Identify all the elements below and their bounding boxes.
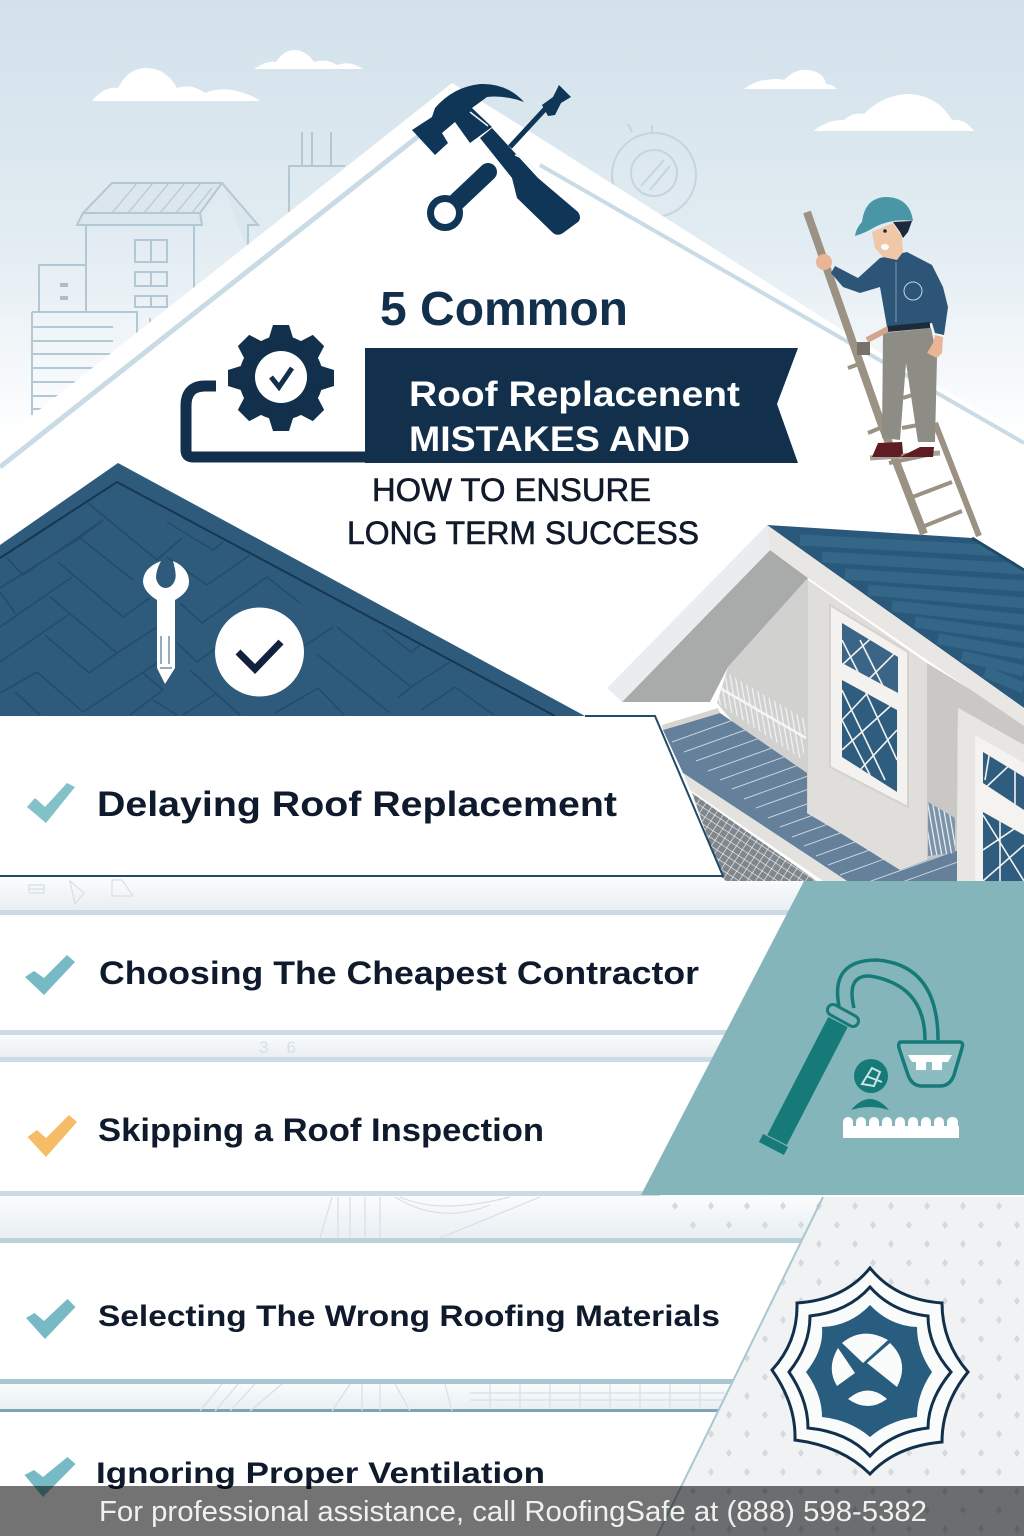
item 2: Choosing The Cheapest Contractor [99, 955, 699, 991]
icon: circled check [215, 608, 304, 696]
bracket line [186, 386, 370, 457]
icon: octagonal star badge [772, 1268, 968, 1474]
panel: dotted bottom right with badge [657, 1197, 1024, 1536]
tool pouch and strap [867, 328, 890, 340]
right wall [927, 663, 1024, 860]
shoes [872, 442, 934, 457]
gray soffit and side wall [622, 550, 808, 702]
footer bar: For professional assistance, call RoofingSafe at (888) 598-5382 [99, 1496, 927, 1528]
banner text: Roof Replacenent [409, 375, 740, 414]
hammer [412, 84, 580, 235]
list row 1 panel [0, 716, 723, 876]
screwdriver [510, 85, 571, 147]
hands [816, 254, 943, 358]
sky background [0, 0, 1024, 440]
item 5 [24, 1457, 545, 1497]
item 4 [26, 1299, 720, 1339]
left roof illustration [0, 463, 585, 716]
title banner with gear [186, 325, 798, 463]
background bands and dividers [0, 878, 820, 1412]
house illustration [607, 525, 1024, 890]
ghost numbers: 3 6 [259, 1038, 296, 1057]
hair [893, 221, 912, 238]
clouds [92, 50, 974, 131]
subtitle: HOW TO ENSURE [372, 472, 651, 508]
belt [888, 325, 930, 329]
dormer wall [808, 580, 927, 870]
legs [882, 328, 937, 442]
small railing [928, 802, 955, 856]
heading: 5 Common: 5 Common [380, 283, 628, 336]
panel: teal with gutter icon [641, 881, 1024, 1195]
face [872, 223, 903, 260]
icon: gutter hose and bucket [761, 960, 963, 1151]
item 5: Ignoring Proper Ventilation [96, 1457, 545, 1490]
hard hat [855, 197, 913, 236]
window two [957, 708, 1024, 881]
item 4: Selecting The Wrong Roofing Materials [98, 1300, 720, 1333]
subtitle [347, 472, 699, 551]
background line art: city buildings [32, 132, 345, 415]
ghost shapes [29, 880, 725, 1411]
ladder [807, 212, 979, 536]
icon: gear with check [228, 325, 334, 431]
roof rafter lines [0, 127, 1024, 467]
railing [717, 673, 807, 760]
roof shingles [767, 525, 1024, 708]
banner text: MISTAKES AND [409, 420, 690, 459]
shirt [831, 252, 948, 335]
item 1: Delaying Roof Replacement [97, 785, 617, 824]
icon: crossed hammer, screwdriver and wrench [412, 84, 580, 235]
footer bar [0, 1486, 1024, 1536]
gable edge [607, 525, 770, 702]
item 3 [28, 1112, 544, 1157]
lower trim and mesh [662, 708, 720, 730]
porch deck [663, 713, 957, 881]
wrench [430, 172, 488, 228]
window one [830, 605, 908, 807]
background line art: ghost stopwatch [612, 124, 696, 217]
subtitle: LONG TERM SUCCESS [347, 515, 699, 551]
eye and mouth [883, 229, 887, 233]
worker [816, 197, 948, 457]
icon: white wrench [143, 561, 189, 684]
ribbon [365, 348, 798, 463]
item 3: Skipping a Roof Inspection [98, 1112, 544, 1148]
banner text [409, 375, 740, 459]
mistakes checklist [24, 783, 720, 1497]
white roof fascia [767, 525, 1024, 726]
